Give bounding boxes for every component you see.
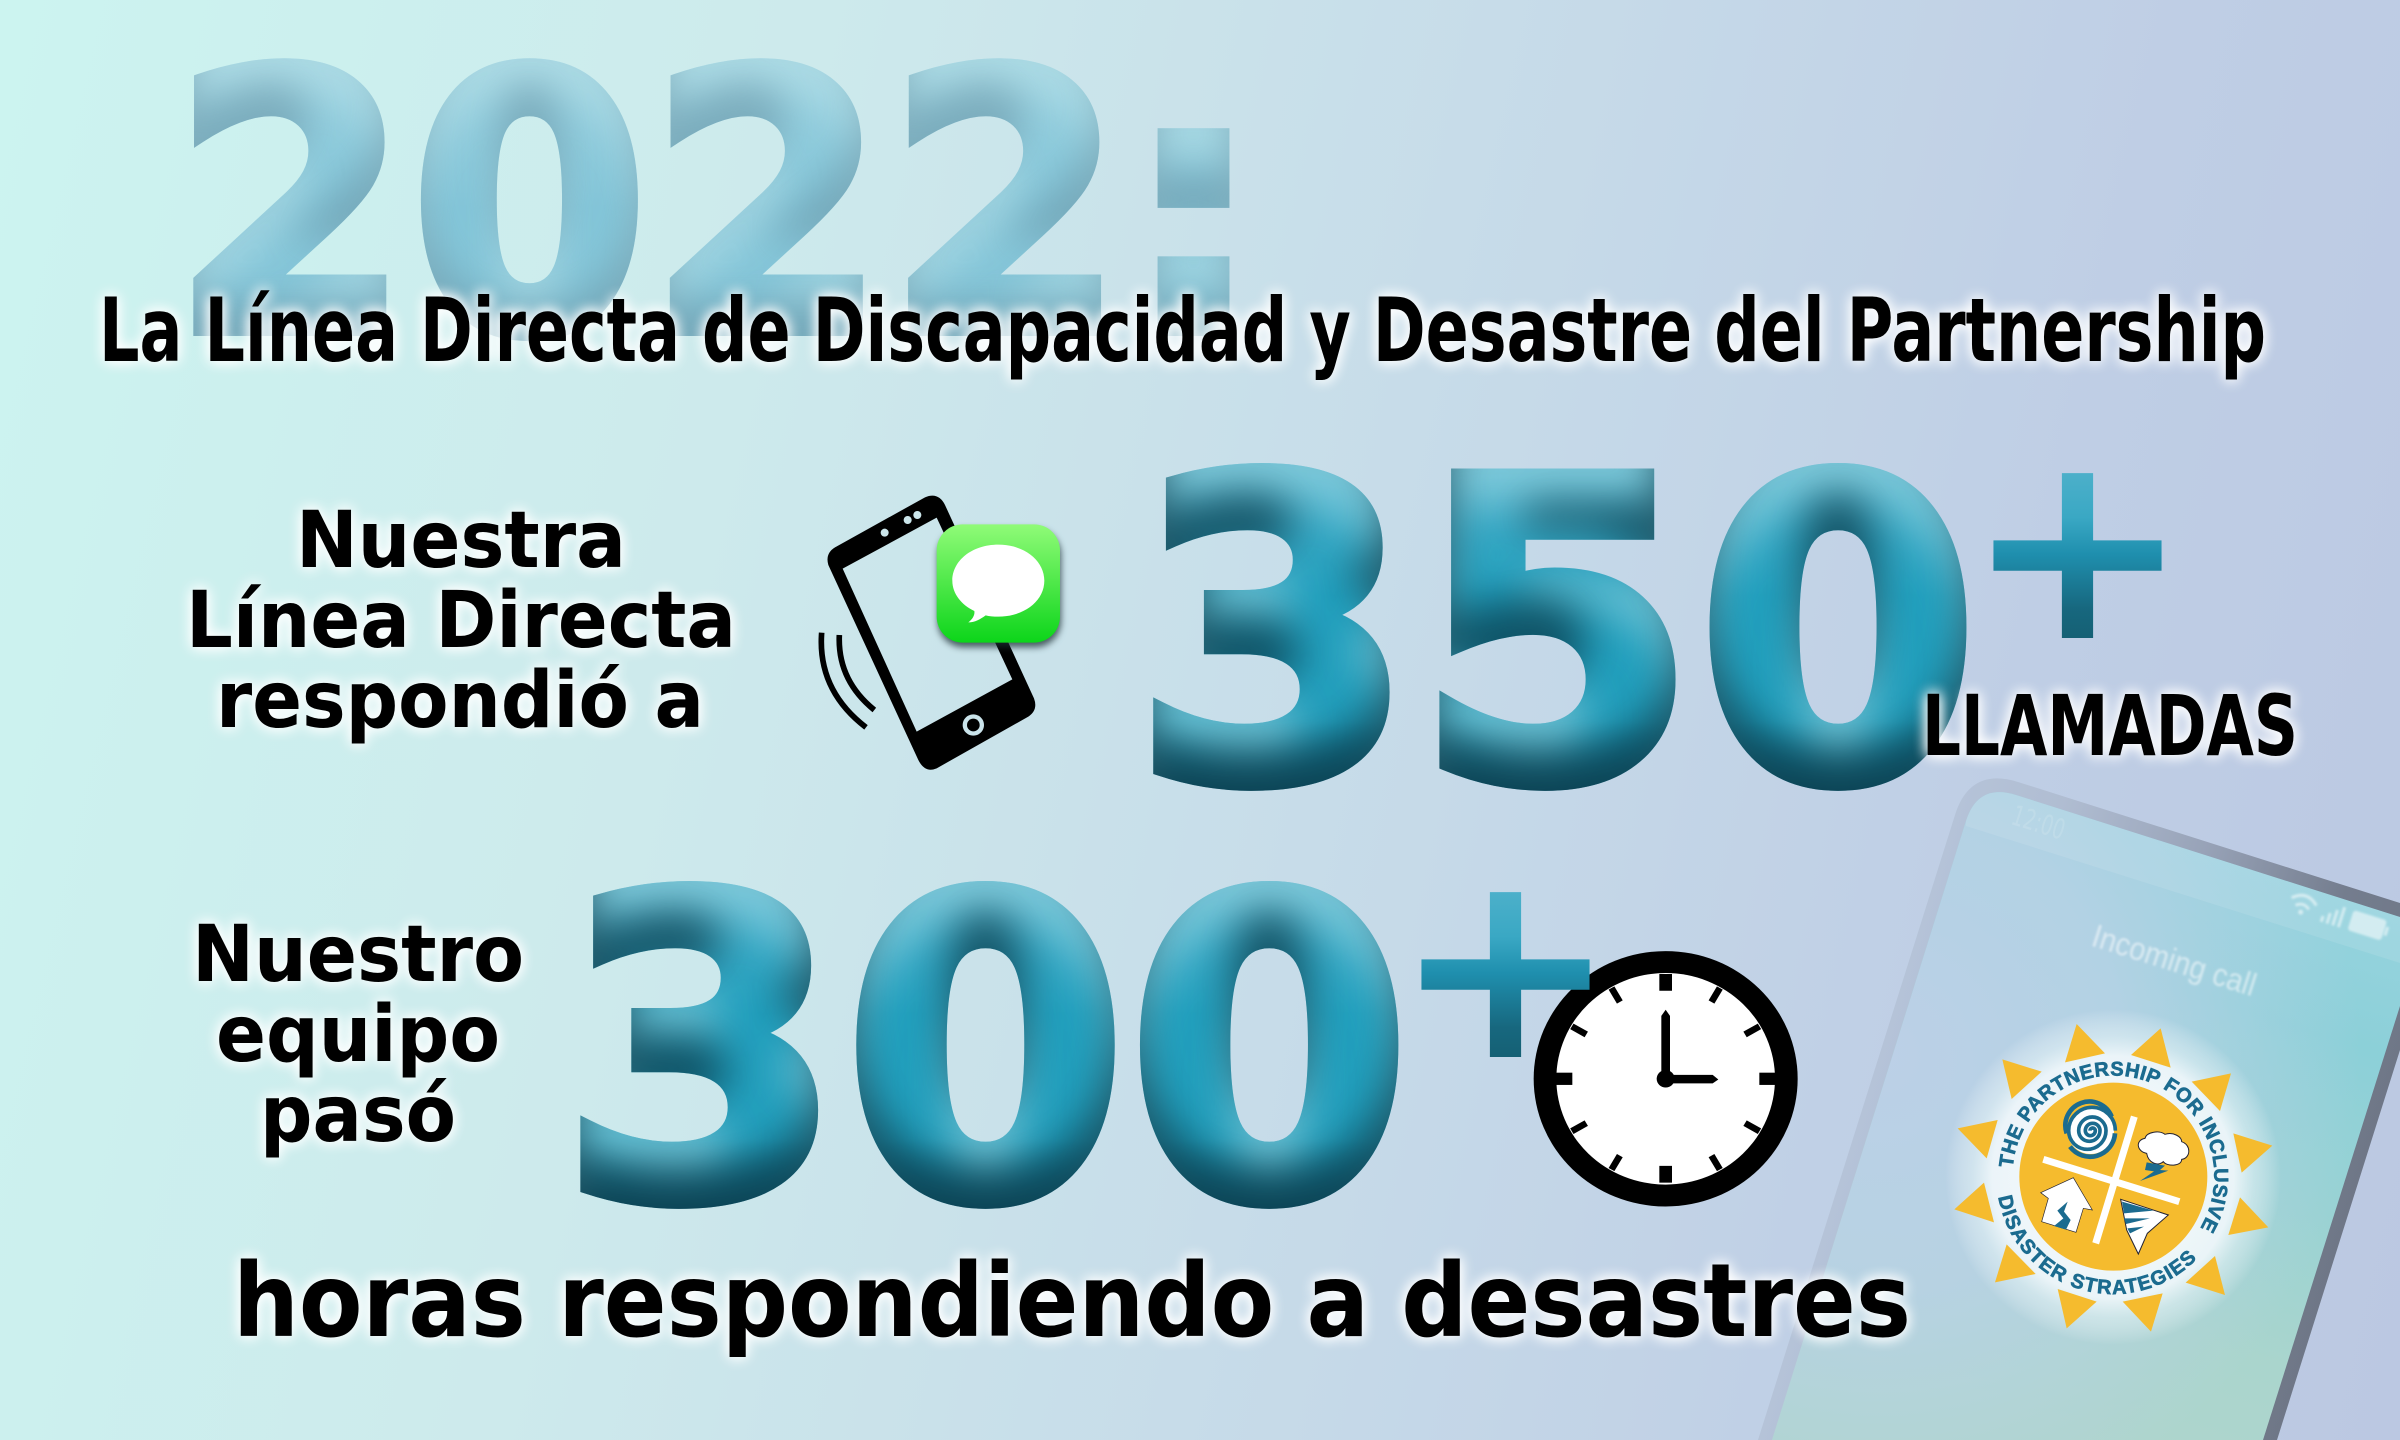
message app icon <box>937 524 1060 643</box>
tornado symbol <box>2121 1199 2168 1254</box>
icon: phone with message bubble <box>821 496 1060 770</box>
logo ring text: THE PARTNERSHIP FOR INCLUSIVE <box>1998 1061 2228 1234</box>
number 350: 350 <box>1133 393 1979 876</box>
phone screen <box>1772 792 2400 1440</box>
phone frame <box>1758 778 2400 1440</box>
logo ring text: DISASTER STRATEGIES <box>1998 1194 2196 1295</box>
sun rays <box>1954 1024 2272 1332</box>
text: calls lead-in <box>186 496 736 746</box>
logo glow <box>1945 1009 2281 1345</box>
text: calls lead-in: Línea Directa <box>186 576 736 666</box>
damaged house symbol <box>2041 1178 2092 1232</box>
logo: The Partnership for Inclusive Disaster Strategies <box>1954 1024 2272 1332</box>
text: calls lead-in: Nuestra <box>296 496 626 586</box>
white cross <box>2043 1117 2179 1243</box>
storm cloud symbol <box>2138 1132 2189 1181</box>
text: team lead-in: equipo <box>216 990 500 1080</box>
phone handset <box>827 496 1035 770</box>
background phone illustration <box>1758 778 2400 1440</box>
clock ticks <box>1555 974 1777 1183</box>
clock hands <box>1661 1010 1718 1086</box>
bottom caption: horas respondiendo a desastres <box>233 1242 1911 1361</box>
status icons: wifi, signal, battery <box>2287 891 2391 942</box>
hurricane symbol <box>2065 1102 2115 1157</box>
sun disc <box>2019 1083 2207 1271</box>
vibration arcs <box>821 633 874 727</box>
year heading 2022: 2022: <box>172 0 1262 415</box>
text: team lead-in <box>192 910 524 1160</box>
number 300: 300 <box>560 811 1411 1294</box>
text: team lead-in: pasó <box>260 1070 456 1160</box>
icon: clock <box>1534 951 1798 1207</box>
status bar clock: 12:00 <box>2008 799 2069 847</box>
incoming call label: Incoming call <box>2088 918 2261 1003</box>
text: team lead-in: Nuestro <box>192 910 524 1000</box>
plus sign after 350: + <box>1965 395 2190 701</box>
text: calls lead-in: respondió a <box>216 656 704 746</box>
plus sign after 300: + <box>1393 814 1618 1120</box>
